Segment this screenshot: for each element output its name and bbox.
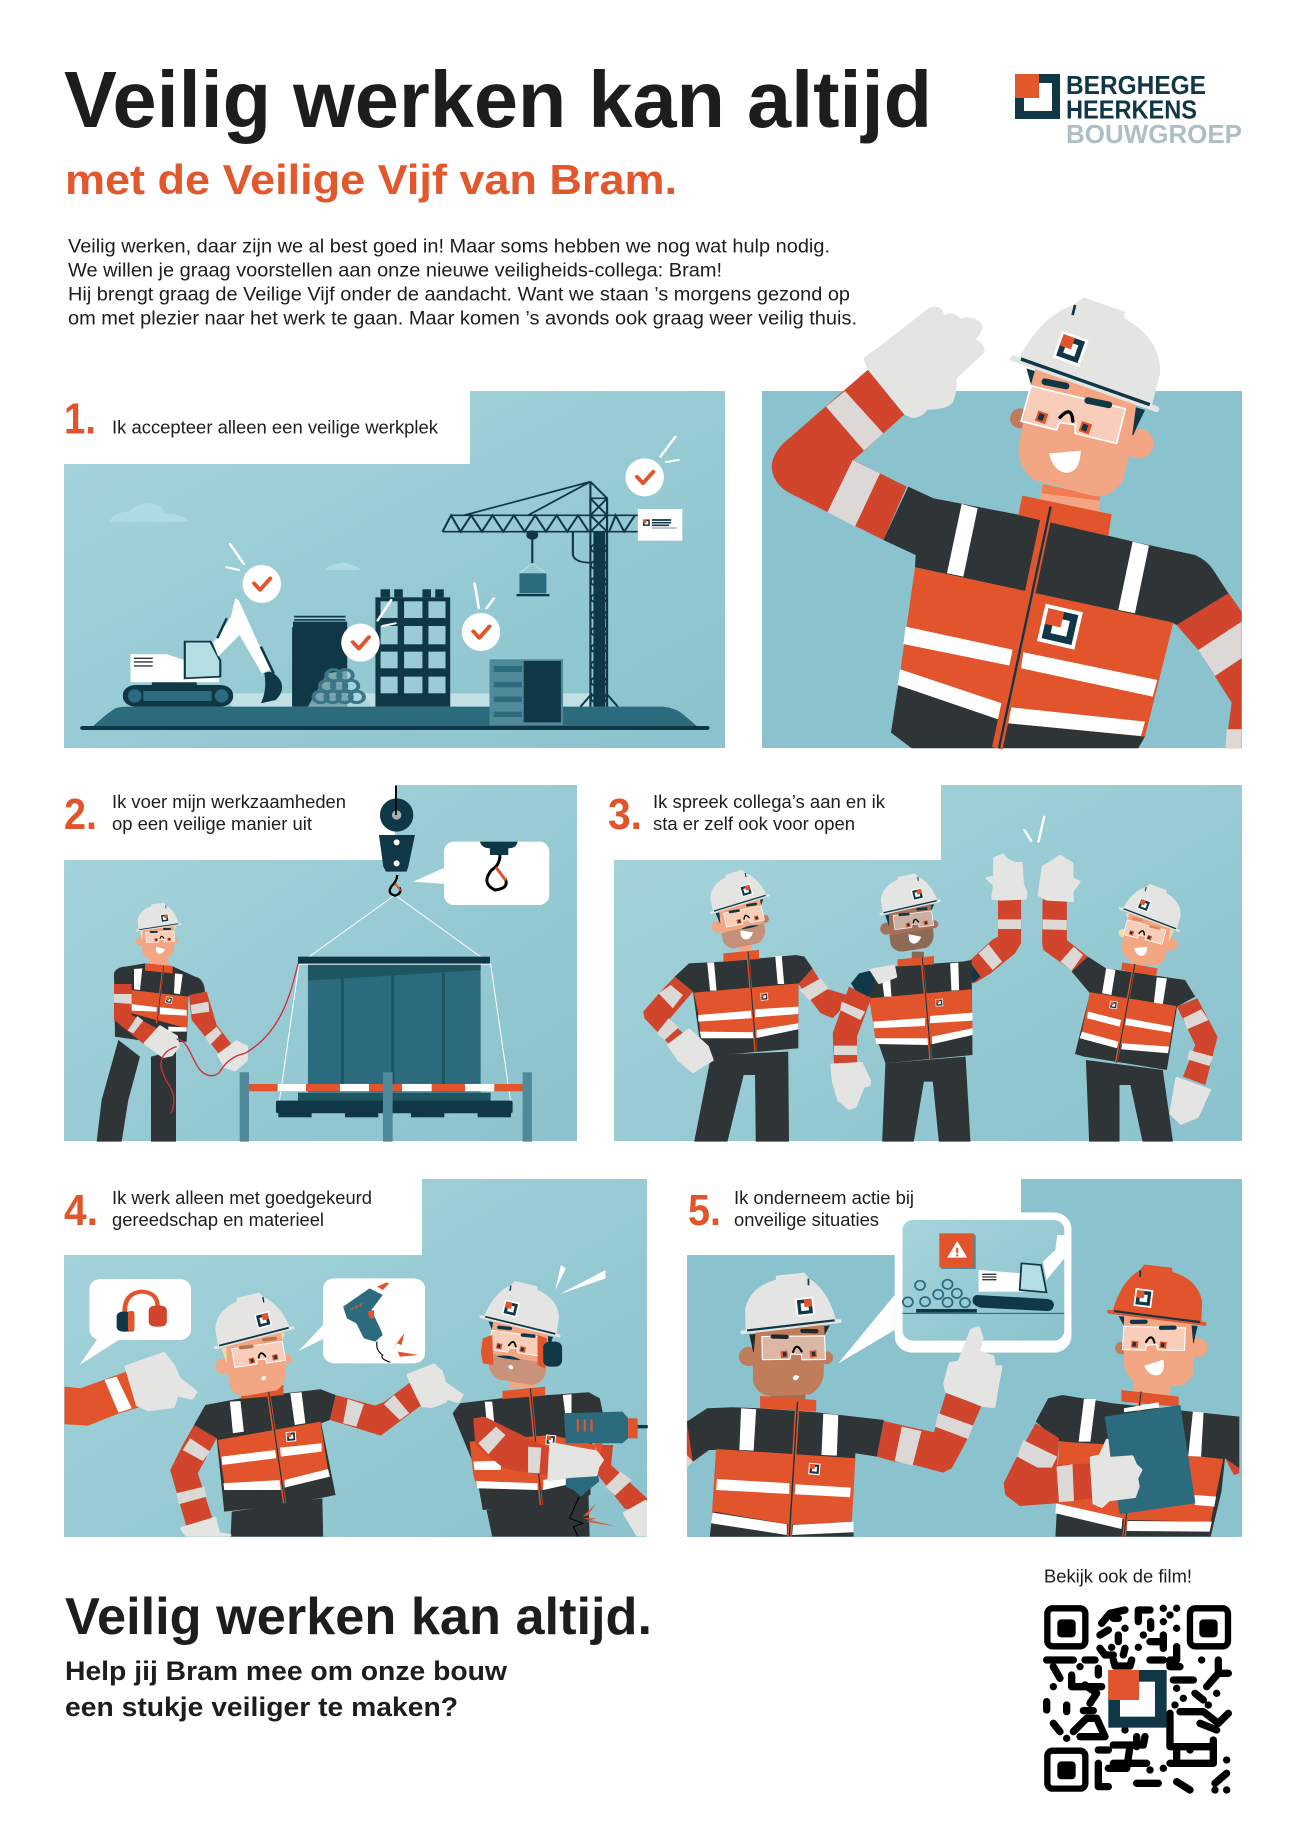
panel 4 background xyxy=(64,1179,647,1537)
panel 2 background xyxy=(64,785,577,1141)
worker head middle xyxy=(870,869,949,957)
worker with tag line xyxy=(97,955,298,1142)
step 1 caption: Ik accepteer alleen een veilige werkplek xyxy=(112,418,439,438)
step 2 caption: Ik voer mijn werkzaamheden xyxy=(112,792,346,812)
worker left body pointing xyxy=(687,1328,1001,1537)
closing heading: Veilig werken kan altijd. xyxy=(65,1588,652,1646)
worker right with drill xyxy=(453,1265,648,1537)
step 3 caption: sta er zelf ook voor open xyxy=(653,814,855,834)
step 1 number: 1. xyxy=(64,394,96,444)
worker head right xyxy=(1105,877,1194,973)
intro text: We willen je graag voorstellen aan onze nieuwe veiligheids-collega: Bram! xyxy=(68,260,722,282)
step 5 caption: Ik onderneem actie bij xyxy=(734,1188,914,1208)
logo: Berghege Heerkens Bouwgroep xyxy=(1015,70,1242,149)
step 4 number: 4. xyxy=(64,1186,98,1235)
speech bubble: unsafe situation scene xyxy=(838,1212,1071,1363)
panel 2: safe manner xyxy=(64,785,577,1142)
Bram head xyxy=(977,282,1193,514)
construction site illustration xyxy=(80,482,710,730)
step 5 caption: onveilige situaties xyxy=(734,1210,879,1230)
step 3 caption xyxy=(653,792,886,834)
intro text xyxy=(68,236,857,330)
worker right head with orange helmet xyxy=(1100,1261,1217,1392)
worker head xyxy=(131,901,185,962)
logo: Berghege Heerkens Bouwgroep: BOUWGROEP xyxy=(1066,119,1242,149)
intro text: Veilig werken, daar zijn we al best goed in! Maar soms hebben we nog wat hulp nodig. xyxy=(68,236,830,258)
panel 1 background xyxy=(64,391,725,748)
load illustration xyxy=(240,895,532,1142)
speech bubble: hook xyxy=(413,842,549,905)
Bram body xyxy=(772,308,1242,748)
step 3 caption: Ik spreek collega’s aan en ik xyxy=(653,792,886,812)
check marks xyxy=(227,437,678,662)
panel: hero Bram waving xyxy=(762,282,1242,748)
speech bubble: ear protection xyxy=(80,1279,191,1365)
worker right head xyxy=(467,1275,574,1392)
step 3 number: 3. xyxy=(608,790,642,839)
worker left head xyxy=(730,1269,848,1402)
ear muffs xyxy=(481,1335,562,1368)
closing question: Help jij Bram mee om onze bouw xyxy=(65,1656,508,1686)
panel 3 background xyxy=(614,785,1242,1141)
intro text: Hij brengt graag de Veilige Vijf onder de aandacht. Want we staan ’s morgens gezond op xyxy=(68,284,850,306)
panel 4: approved tools xyxy=(64,1179,648,1537)
intro text: om met plezier naar het werk te gaan. Maar komen ’s avonds ook graag weer veilig thuis. xyxy=(68,308,857,330)
worker head left xyxy=(698,864,781,955)
QR code xyxy=(1047,1608,1228,1790)
panel 5 background xyxy=(687,1179,1242,1537)
closing question xyxy=(65,1656,508,1722)
QR label: Bekijk ook de film! xyxy=(1044,1566,1192,1586)
closing question: een stukje veiliger te maken? xyxy=(65,1692,458,1722)
step 5 caption xyxy=(734,1188,914,1230)
title: Veilig werken kan altijd xyxy=(64,55,932,144)
step 2 caption: op een veilige manier uit xyxy=(112,814,312,834)
step 4 caption: gereedschap en materieel xyxy=(112,1210,324,1230)
three workers bodies high five xyxy=(643,817,1218,1142)
panel 5: act on unsafe situations xyxy=(687,1179,1242,1537)
logo: Berghege Heerkens Bouwgroep: HEERKENS xyxy=(1066,94,1197,124)
step 4 caption: Ik werk alleen met goedgekeurd xyxy=(112,1188,372,1208)
pointing arm from left xyxy=(65,1353,196,1426)
speech bubble: drill xyxy=(299,1278,425,1363)
subtitle: met de Veilige Vijf van Bram. xyxy=(65,156,677,203)
step 2 number: 2. xyxy=(64,790,97,839)
worker left body xyxy=(170,1365,462,1537)
step 5 number: 5. xyxy=(688,1186,721,1235)
logo: Berghege Heerkens Bouwgroep: BERGHEGE xyxy=(1066,70,1206,100)
worker right body with folder xyxy=(1004,1380,1239,1537)
panel 1: safe workplace xyxy=(64,391,725,748)
crane hook xyxy=(379,786,415,896)
hero background xyxy=(762,391,1242,748)
step 4 caption xyxy=(112,1188,372,1230)
worker left head xyxy=(200,1286,307,1404)
panel 3: speak to colleagues xyxy=(608,785,1242,1142)
step 2 caption xyxy=(112,792,346,834)
